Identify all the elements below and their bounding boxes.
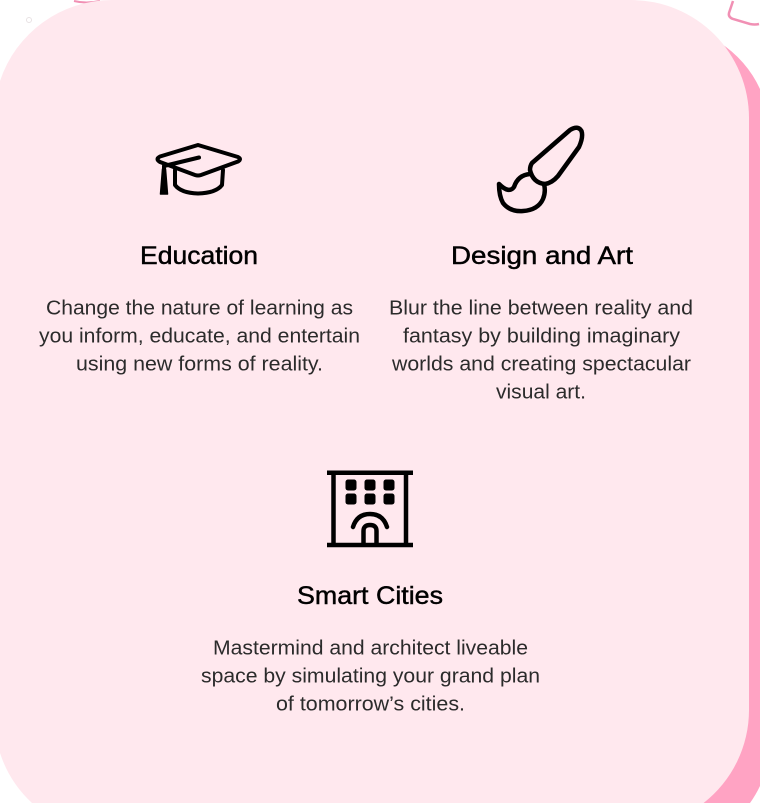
text: Education description: you inform, educate, and entertain [39, 326, 360, 348]
card: Education [39, 145, 360, 376]
pink backing panel [600, 25, 760, 803]
text: Design and Art description: visual art. [496, 382, 586, 404]
card: Smart Cities [201, 472, 540, 716]
text: Smart Cities description: of tomorrow’s cities. [276, 694, 465, 716]
text: Smart Cities description [201, 638, 540, 716]
decorative small circle [26, 18, 32, 22]
text: Design and Art description: Blur the line between reality and [389, 298, 693, 320]
text: Education description: Change the nature of learning as [46, 298, 353, 320]
text: Education description: using new forms of reality. [76, 354, 323, 376]
text: Education description [39, 298, 360, 376]
text: Design and Art description [389, 298, 693, 404]
text: Design and Art description: fantasy by building imaginary [403, 326, 680, 348]
icon: graduation cap [158, 145, 240, 194]
heading: Education: Education [140, 242, 258, 270]
text: Smart Cities description: Mastermind and architect liveable [213, 638, 528, 660]
card: Design and Art [389, 128, 693, 404]
text: Design and Art description: worlds and creating spectacular [391, 354, 691, 376]
icon: paintbrush [499, 128, 582, 211]
heading: Design and Art: Design and Art [451, 242, 633, 270]
decorative outlined shape: top left [74, 1, 100, 2]
icon: building [327, 472, 413, 545]
decorative outlined square: top right [729, 1, 759, 24]
heading: Smart Cities: Smart Cities [297, 582, 443, 610]
text: Smart Cities description: space by simulating your grand plan [201, 666, 540, 688]
